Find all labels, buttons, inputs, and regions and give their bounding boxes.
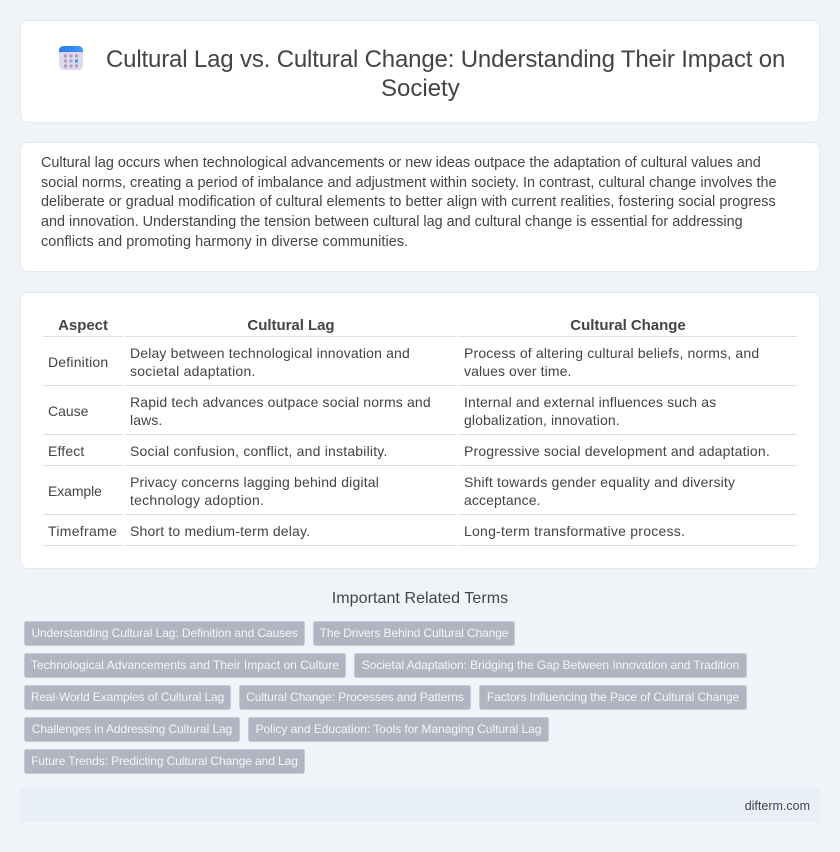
row: definition: Delay between technological innovation and	[130, 345, 410, 361]
row: definition: societal adaptation.	[130, 363, 256, 379]
intro paragraph: deliberate or gradual modification of cultural elements to better align with current realities, fostering social progress	[41, 194, 776, 210]
tag: Real-World Examples of Cultural Lag	[31, 690, 224, 704]
title: Society	[381, 75, 460, 102]
row: example: Example	[48, 483, 102, 499]
row: cause: Internal and external influences such as	[464, 394, 716, 410]
tag	[479, 685, 747, 710]
tag	[24, 653, 346, 678]
tag: Future Trends: Predicting Cultural Change and Lag	[31, 754, 298, 768]
tag: Understanding Cultural Lag: Definition and Causes	[31, 626, 298, 640]
table header: Cultural Change	[570, 317, 686, 334]
row: effect: Progressive social development and adaptation.	[464, 443, 770, 459]
row: effect: Social confusion, conflict, and instability.	[130, 443, 388, 459]
tag: Factors Influencing the Pace of Cultural Change	[487, 690, 739, 704]
row: timeframe: Timeframe	[48, 523, 117, 539]
row: cause: globalization, innovation.	[464, 412, 620, 428]
intro paragraph: Cultural lag occurs when technological advancements or new ideas outpace the adaptation of cultural values and	[41, 155, 761, 171]
icon: calendar	[59, 46, 83, 70]
row: definition: Definition	[48, 354, 108, 370]
intro paragraph	[41, 155, 777, 250]
row: timeframe: Short to medium-term delay.	[130, 523, 310, 539]
footer source text: difterm.com	[745, 799, 810, 813]
row: cause	[48, 394, 716, 428]
tag: Technological Advancements and Their Impact on Culture	[31, 658, 339, 672]
row: example: technology adoption.	[130, 492, 264, 508]
header panel	[20, 20, 820, 123]
intro text panel	[20, 142, 820, 272]
title	[106, 46, 785, 102]
tag: Challenges in Addressing Cultural Lag	[32, 722, 232, 736]
related terms tags	[24, 621, 747, 774]
tag	[24, 621, 305, 646]
tag	[239, 685, 471, 710]
row: timeframe	[48, 523, 685, 539]
row: cause: laws.	[130, 412, 162, 428]
row: definition: values over time.	[464, 363, 572, 379]
title: Cultural Lag vs. Cultural Change: Understanding Their Impact on	[106, 46, 785, 73]
row: example: Privacy concerns lagging behind digital	[130, 474, 379, 490]
tag	[313, 621, 515, 646]
table header: Cultural Lag	[247, 317, 335, 334]
intro paragraph: and innovation. Understanding the tension between cultural lag and cultural change is essential for addressing	[41, 214, 743, 230]
row: timeframe: Long-term transformative process.	[464, 523, 685, 539]
tag	[354, 653, 747, 678]
table header: Aspect	[58, 317, 108, 334]
row: example	[48, 474, 735, 508]
row: example: acceptance.	[464, 492, 541, 508]
row: cause: Rapid tech advances outpace social norms and	[130, 394, 431, 410]
tag: Policy and Education: Tools for Managing Cultural Lag	[256, 722, 541, 736]
table header	[58, 317, 686, 334]
row: definition	[48, 345, 759, 379]
row: cause: Cause	[48, 403, 88, 419]
tag	[248, 717, 549, 742]
tag: The Drivers Behind Cultural Change	[320, 626, 508, 640]
row: effect: Effect	[48, 443, 84, 459]
intro paragraph: social norms, creating a period of imbalance and adjustment within society. In contrast, cultural change involves the	[41, 175, 777, 191]
tag	[24, 717, 240, 742]
row: example: Shift towards gender equality and diversity	[464, 474, 735, 490]
heading: important related terms: Important Related Terms	[332, 590, 508, 607]
footer bar	[20, 788, 820, 822]
intro paragraph: conflicts and promoting harmony in diverse communities.	[41, 234, 408, 250]
tag: Societal Adaptation: Bridging the Gap Between Innovation and Tradition	[362, 658, 739, 672]
row: effect	[48, 443, 770, 459]
tag	[24, 685, 231, 710]
row: definition: Process of altering cultural beliefs, norms, and	[464, 345, 759, 361]
comparison table panel	[20, 292, 820, 569]
tag	[24, 749, 305, 774]
tag: Cultural Change: Processes and Patterns	[246, 690, 464, 704]
